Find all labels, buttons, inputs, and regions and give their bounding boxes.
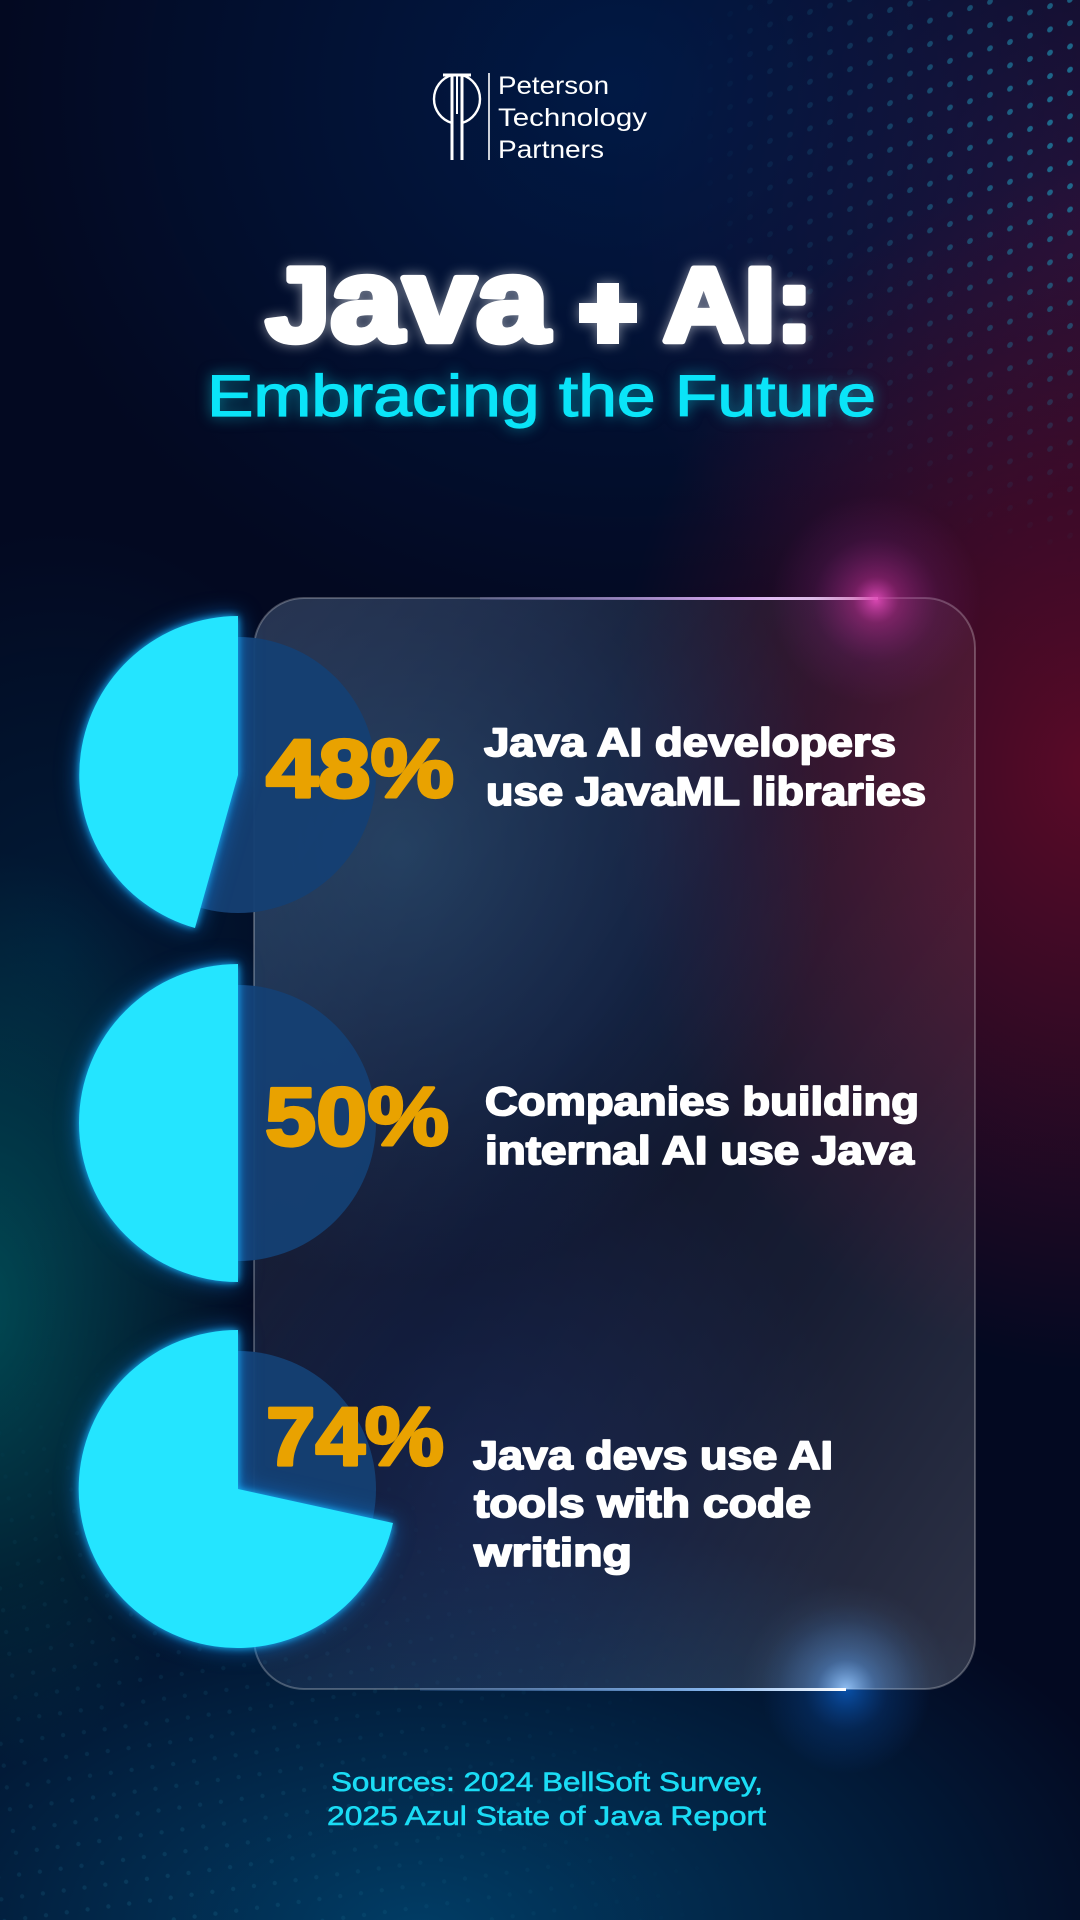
stat: 74%: 74% xyxy=(266,1390,444,1483)
logo wordmark: Technology xyxy=(498,104,648,132)
stat: 50%: 50% xyxy=(265,1070,449,1163)
stat: 48%: 48% xyxy=(266,722,454,815)
title: AI: xyxy=(663,247,813,364)
label: 74%: tools with code xyxy=(474,1482,811,1526)
label: 50% xyxy=(485,1080,919,1173)
icon: plus xyxy=(579,283,637,344)
label: 48% xyxy=(484,721,926,814)
glow: blue behind panel xyxy=(761,1604,931,1774)
pie chart: 48% xyxy=(79,616,376,928)
pie chart: 74% xyxy=(79,1330,393,1648)
label: 50%: Companies building xyxy=(485,1080,919,1124)
title xyxy=(266,234,813,367)
logo wordmark: Peterson xyxy=(498,72,609,100)
label: 74% xyxy=(473,1434,833,1575)
logo mark xyxy=(434,73,489,160)
title: Java xyxy=(266,234,550,367)
sources xyxy=(327,1767,767,1831)
label: 74%: writing xyxy=(473,1531,632,1575)
sources: 2025 Azul State of Java Report xyxy=(327,1801,767,1831)
logo xyxy=(434,72,648,164)
logo wordmark xyxy=(498,72,648,164)
sources: Sources: 2024 BellSoft Survey, xyxy=(331,1767,763,1797)
label: 50%: internal AI use Java xyxy=(485,1129,915,1173)
label: 48%: use JavaML libraries xyxy=(486,770,926,814)
logo wordmark: Partners xyxy=(498,136,604,164)
label: 74%: Java devs use AI xyxy=(473,1434,833,1478)
glow: pink light xyxy=(771,495,981,705)
subtitle: Embracing the Future xyxy=(207,364,876,429)
pie chart: 50% xyxy=(79,964,376,1282)
label: 48%: Java AI developers xyxy=(484,721,896,765)
panel: glass card xyxy=(254,597,975,1794)
